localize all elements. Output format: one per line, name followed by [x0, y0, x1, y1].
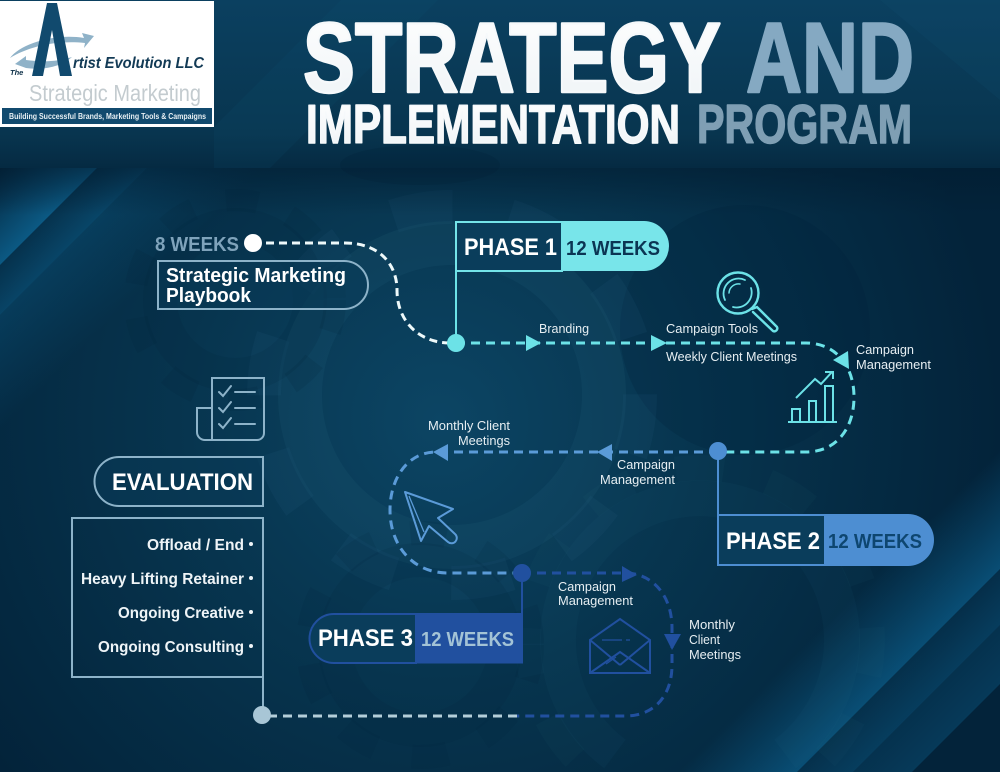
logo tagline band: Building Successful Brands, Marketing Tools & Campaigns — [9, 112, 206, 121]
labels: phase 1: Campaign Tools — [666, 322, 758, 336]
panel: phase 1: PHASE 1 — [464, 234, 557, 261]
arrows: phase 2 — [433, 444, 612, 461]
route: phase 2 blue — [390, 452, 718, 573]
panel: strategic marketing playbook: Playbook — [166, 285, 252, 307]
labels: phase 1 — [539, 322, 932, 372]
panel: phase 2: 12 WEEKS — [828, 531, 922, 553]
labels: phase 3: Campaign — [558, 580, 616, 594]
logo company name: rtist Evolution LLC — [73, 55, 205, 72]
panel: evaluation list: Ongoing Consulting — [98, 639, 244, 656]
panel: phase 3: PHASE 3 — [318, 625, 413, 652]
logo — [0, 1, 214, 127]
labels: phase 2: Meetings — [458, 434, 510, 448]
arrows: phase 1 — [526, 335, 849, 369]
icon: envelope — [590, 619, 650, 673]
icon: magnifying glass — [718, 272, 777, 331]
end marker — [253, 706, 271, 724]
logo strategic marketing: Strategic Marketing — [29, 80, 201, 106]
start marker — [155, 234, 262, 256]
route: phase 3 navy — [517, 573, 672, 716]
title: AND — [746, 2, 914, 113]
labels: phase 1: Branding — [539, 322, 589, 336]
labels: phase 2: Monthly Client — [428, 419, 511, 433]
panel: evaluation list: Ongoing Creative — [118, 605, 244, 622]
panel: phase 3: 12 WEEKS — [421, 629, 514, 651]
labels: phase 1: Management — [856, 358, 932, 372]
panel: phase 1 — [447, 221, 669, 352]
labels: phase 1: Campaign — [856, 343, 914, 357]
panel: strategic marketing playbook — [158, 261, 368, 309]
title — [303, 2, 914, 155]
icon: checklist — [197, 378, 264, 440]
gears — [135, 200, 872, 758]
labels: phase 1: Weekly Client Meetings — [666, 350, 797, 364]
logo swoosh — [10, 33, 94, 69]
labels: phase 3: Meetings — [689, 648, 741, 662]
panel: evaluation list: Heavy Lifting Retainer — [81, 571, 244, 588]
panel: evaluation list — [72, 518, 263, 715]
logo tagline band — [2, 108, 212, 124]
8 weeks label: 8 WEEKS — [155, 234, 239, 256]
labels: phase 3: Management — [558, 594, 634, 608]
labels: phase 3: Monthly — [689, 618, 736, 632]
labels: phase 2 — [428, 419, 676, 487]
panel: evaluation list: Offload / End — [147, 537, 244, 554]
route: playbook to phase 1 — [253, 243, 450, 343]
logo letter A — [32, 3, 72, 76]
arrows: phase 3 — [622, 566, 681, 650]
panel: evaluation heading — [94, 457, 263, 506]
panel: strategic marketing playbook: Strategic Marketing — [166, 265, 346, 287]
logo the: The — [10, 68, 23, 77]
panel: phase 2: PHASE 2 — [726, 528, 820, 555]
title: IMPLEMENTATION — [306, 93, 680, 155]
title: STRATEGY — [303, 2, 721, 113]
icon: cursor — [405, 492, 457, 543]
panel: phase 2 — [709, 442, 934, 566]
labels: phase 2: Campaign — [617, 458, 675, 472]
route: to evaluation — [262, 714, 517, 718]
labels: phase 3 — [558, 580, 741, 662]
title: PROGRAM — [697, 93, 912, 155]
labels: phase 3: Client — [689, 633, 721, 647]
panel: evaluation heading: EVALUATION — [112, 469, 253, 496]
icon: growth chart — [788, 372, 837, 422]
panel: phase 3 — [310, 564, 531, 664]
panel: phase 1: 12 WEEKS — [566, 238, 660, 260]
route: phase 1 cyan — [456, 343, 854, 452]
labels: phase 2: Management — [600, 473, 676, 487]
